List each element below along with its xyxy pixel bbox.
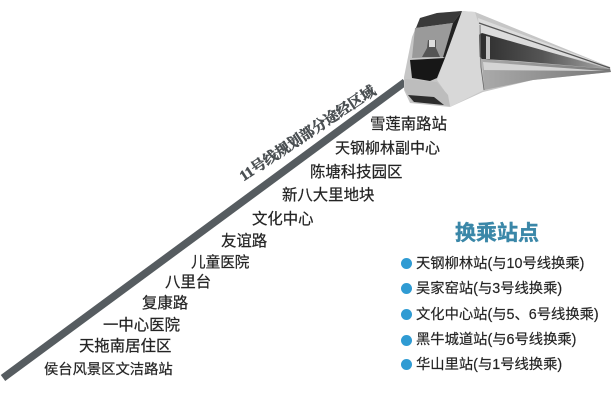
silhouette (404, 11, 611, 107)
side windows (475, 33, 610, 69)
bullet (401, 335, 412, 346)
transfer station text: 文化中心站(与5、6号线换乘) (416, 307, 599, 323)
station: 八里台 (165, 274, 211, 291)
transfer station text: 黑牛城道站(与6号线换乘) (416, 332, 576, 348)
lower side (482, 59, 611, 90)
station: 天拖南居住区 (79, 338, 171, 355)
station: 复康路 (142, 295, 188, 312)
station: 友谊路 (221, 233, 267, 250)
station: 新八大里地块 (282, 187, 374, 204)
transfer station text: 吴家窑站(与3号线换乘) (416, 281, 562, 297)
station: 侯台风景区文洁路站 (44, 362, 173, 378)
station: 雪莲南路站 (370, 116, 447, 133)
bullet (401, 359, 412, 370)
bullet (401, 309, 412, 320)
black mask (410, 58, 445, 81)
rotated line title: 11号线规划部分途经区域 (237, 83, 379, 185)
station: 儿童医院 (191, 255, 249, 271)
bullet (401, 283, 412, 294)
cab roof (416, 11, 462, 28)
station: 文化中心 (252, 211, 314, 228)
icon: metro train (404, 11, 611, 107)
transfer station text: 天钢柳林站(与10号线换乘) (416, 256, 584, 272)
station: 天钢柳林副中心 (335, 140, 440, 157)
upper side (478, 18, 610, 67)
station: 陈塘科技园区 (310, 164, 402, 181)
silver nose (437, 11, 484, 107)
bullet (401, 258, 412, 269)
station: 一中心医院 (103, 317, 180, 334)
windshield (412, 23, 453, 58)
bumper (405, 79, 450, 106)
station list along route (44, 116, 447, 378)
transfer station text: 华山里站(与1号线换乘) (416, 357, 562, 373)
heading: transfer stations: 换乘站点 (455, 222, 539, 245)
